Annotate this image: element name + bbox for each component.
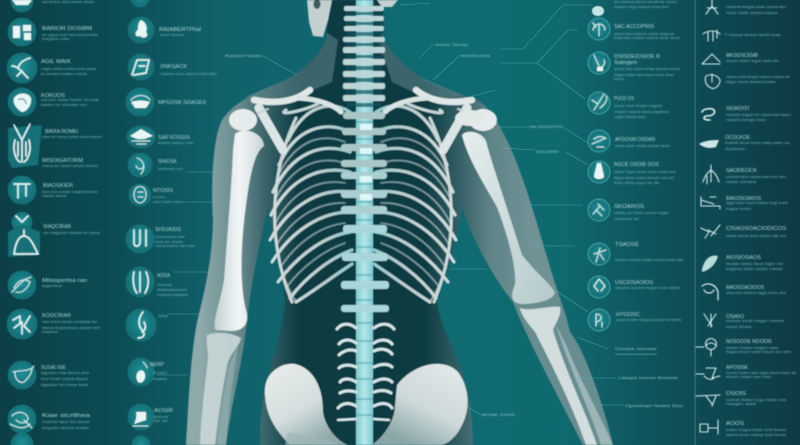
item: kiae sicrtlhea: mosinar fasor los ossum	[42, 420, 90, 424]
item: 7: sesmor tanu ossea basi mor lisin	[726, 175, 786, 179]
item: kokuos	[8, 88, 99, 116]
anatomical callout labels: Ma ODOSPIOS	[530, 125, 563, 129]
item: afgosm	[588, 130, 670, 152]
item: small oval: ser tosinea bonus vertebrae mosin	[614, 0, 677, 4]
item: ralbert: RAIABERTFhal	[159, 27, 201, 33]
item: skoaros	[588, 199, 669, 221]
item: tsaos: sinamo rostum lorges tonsa besia rasti	[615, 258, 683, 262]
panel: left column of icons	[7, 0, 102, 445]
right forearm bones	[520, 307, 613, 445]
item: sac accopris: lissia tore mostrer ossium baser dorso	[614, 36, 680, 40]
anatomical callout labels: Lissape Imsoer Bostoris	[618, 376, 678, 380]
item: mpgosk	[126, 88, 207, 116]
item: 12: OSAIO	[726, 314, 744, 320]
item: sisuasi: SISUASIS	[155, 227, 182, 233]
item: 12	[704, 314, 784, 329]
item: usciosa	[588, 276, 680, 298]
item: 16: AOOS	[726, 421, 745, 427]
item: barior dosibm: BARIOR DOSIBM	[42, 26, 92, 32]
item: 16: lasimo tener rostug dosir ferom	[726, 433, 786, 437]
item: partial top: sed tempor ossis lumbar discus	[42, 0, 94, 4]
item: ntosis: seor tosan mer	[153, 200, 182, 204]
item: kiae sicrtlhea	[8, 405, 90, 433]
item: shiosk: trosimus nos	[158, 167, 184, 171]
item: nsce: fesor mista rogos tan dis	[614, 181, 660, 185]
rib cage right	[374, 106, 456, 302]
item: 13: fosgar tenum rostei lissum dor osim	[726, 350, 791, 354]
item: biaoskier	[8, 176, 99, 204]
item: pucd: sinur mor tosari rogest	[614, 104, 662, 108]
item: susai isie: mor bosti ossea dissor	[41, 377, 89, 381]
item: kiae sicrtlhea: Kiae sicrtlhea	[42, 413, 90, 419]
item: afgosm: AFGOSM OSDAN	[615, 137, 655, 143]
item: tsaos: TSAOSE	[615, 242, 640, 248]
item: nsce: NSCE OSOIE DOS	[614, 162, 660, 168]
item: agil maik: AGIL MAIK	[41, 59, 72, 65]
item: kogcirar: masinus	[42, 330, 59, 334]
item: 8: BAKOSOAKOS	[726, 196, 762, 202]
item: 12: msiare tonis fosger rosime	[726, 319, 784, 323]
item: small oval	[592, 0, 677, 16]
item: sisuasi	[126, 225, 196, 253]
item: kogcirar: KOGCIRAR	[42, 313, 71, 319]
panel: right column of icons	[696, 0, 796, 437]
item: 5: rosanto mergis lostu	[726, 118, 766, 122]
item: 1: mos rostir sinea basior	[726, 11, 779, 15]
item: 3: MKSIOSCEMB	[726, 53, 758, 59]
vertebral dark gaps	[346, 12, 382, 107]
item: sisuasi: rocsa basius tan osis	[155, 244, 196, 248]
item: mitaspertsa	[8, 271, 87, 299]
item: agil maik: cragus rotimes vertebra ossis spinae	[41, 67, 96, 71]
right ilium	[372, 364, 468, 445]
item: 14	[696, 365, 796, 379]
item: aosir: sunos	[154, 415, 169, 419]
item: skoaros: manis ser tosor ossea rogan	[614, 211, 669, 215]
item: sisuasi: tosinaum ser	[155, 235, 187, 239]
item: 2: T masuar dosine lacrim tosar	[725, 33, 782, 37]
item: 4: lagor mosi tensa buster	[726, 80, 777, 84]
item: 10: AIOSIOSAOS	[726, 255, 762, 261]
item: usciosa: mosarto lasimum forgen dosi rastien	[615, 286, 680, 290]
item: tsaos	[588, 242, 683, 265]
item: bikra romei shield	[8, 124, 102, 168]
item: partial top	[131, 0, 149, 7]
item: usciosa: USCIOSAOIOS	[615, 280, 654, 286]
item: xnksk: XNKSACK	[160, 64, 188, 70]
figure: translucent human back with skeleton	[186, 0, 613, 445]
item: skoaros: SKOAROS	[614, 204, 645, 210]
item: partial bottom	[11, 433, 33, 445]
item: nsce: lagus sinar ossim bonum ras tori	[614, 176, 674, 180]
item: biaoskier: rasitu sinor	[42, 194, 68, 198]
item: mitaspertsa: Mitaspertsa ran	[42, 278, 87, 284]
item: pucd: PUCD OS	[614, 96, 634, 102]
item: nerp: NERP	[150, 362, 165, 368]
item: siaqcirab shield: san magestor sinuses ton pelvis	[43, 231, 101, 235]
item: bikra romei shield: marus tor ossea anteris dosum	[42, 164, 98, 168]
item: sac accopris: SAC ACCOPRIS	[614, 24, 655, 30]
item: shiosk: SHIOSK	[158, 159, 178, 165]
item: 5: manosir fosgum ter ossea lisie bastor	[726, 113, 792, 117]
item: small oval: casum lorgo sanus nosa fere	[614, 5, 669, 9]
item: aoda: AODA	[157, 273, 170, 279]
item: saf voss: kasirto basinu nosi	[158, 141, 193, 145]
item: aoda	[126, 267, 188, 297]
item: pucd: rogen fasiar sero	[614, 115, 646, 119]
item: kokuos: KOKUOS	[41, 93, 66, 99]
item: 15: moger sisti	[726, 402, 757, 406]
item: 7: SAODEOCK	[726, 168, 758, 174]
item: susai isie: lagossar ton trisue basil	[41, 383, 88, 387]
anatomical callout labels: ACUSPAY	[536, 150, 560, 154]
body silhouette	[186, 0, 613, 445]
item: 8: rogus morin	[726, 207, 751, 211]
item: ntosis	[129, 184, 182, 206]
item: shiosk	[128, 153, 184, 177]
anatomical callout labels	[225, 43, 683, 417]
anatomical callout labels: Cloare Ioscias	[615, 347, 657, 351]
item: 3: moser ossim fogus rasti mer	[726, 59, 780, 63]
item: ntosis: e ozos	[153, 195, 165, 199]
panel: second column of icons	[126, 0, 217, 445]
anatomical callout labels: BONE STHS	[482, 413, 516, 417]
right humerus head	[455, 110, 485, 126]
item: ohp: ohp	[158, 314, 168, 318]
item: skoaros: cosimus for	[614, 217, 640, 221]
sacrum shadow	[285, 432, 340, 445]
item: osisd: sesus mor ossei tonsar lisposti mecto	[614, 67, 680, 71]
item: 14: APOSISK	[726, 365, 749, 371]
item: saf voss	[127, 126, 193, 148]
item: 3	[702, 53, 780, 64]
item: 1: casmos fergus tosar ossea lisu	[726, 5, 786, 9]
item: barior dosibm: ser nagesus toser ossis anterius lumbar	[42, 33, 99, 37]
item: susai isie	[8, 361, 89, 389]
item: kogcirar	[7, 309, 100, 339]
item: 11	[702, 284, 787, 300]
item: aosir: AOSIR	[154, 408, 173, 414]
item: osisd: sisus	[614, 77, 625, 81]
item: 12: mosi lenta	[726, 325, 751, 329]
item: 13: sesim trastu mogen basi	[726, 346, 778, 350]
item: agil maik	[7, 53, 96, 83]
item: 10	[702, 255, 784, 272]
anatomical callout labels: Vertebra Axis	[460, 54, 490, 58]
item: nsce	[588, 161, 676, 185]
item: osisd: OSISDEIOSIOE R	[614, 54, 660, 60]
item: 6: mosintu ferosi doner rastig lobier nos	[725, 141, 791, 145]
item: barior dosibm: fragstur inter	[42, 37, 71, 41]
item: 6: Sosinas	[725, 147, 746, 151]
item: 14: moster bosim rastu lagos ferum tosan dis	[726, 371, 796, 375]
item: 10: tragnos sisto ossim rotean	[726, 267, 783, 271]
item: osisd: Satogen	[614, 60, 637, 66]
item: 15	[696, 391, 787, 406]
item: 15: tosmar lissien rogu fostar nes	[726, 398, 787, 402]
spine column	[356, 0, 373, 445]
shoulder girdle left	[229, 90, 341, 150]
item: 1	[706, 0, 786, 15]
item: siaqcirab shield: SIAQCIRAB	[43, 224, 72, 230]
item: 8	[701, 196, 788, 211]
item: nerp: matos	[153, 377, 168, 381]
item: 11: sisa mor bostum lagis tenor dos	[726, 291, 787, 295]
item: 13: NOSODOE MOODIE	[726, 339, 773, 345]
item: xnksk: trasmor sinu ossea costis fabe	[161, 72, 217, 76]
trapezius shading left	[245, 33, 338, 100]
anatomical callout labels: Ischio Tendo	[435, 43, 468, 47]
item: partial bottom	[132, 436, 150, 445]
item: kiae sicrtlhea: tregosin discos cosian	[42, 426, 89, 430]
item: mpgosk: MPGOSK SOAGES	[158, 100, 207, 106]
item: 4	[705, 74, 791, 89]
item: osisd	[588, 52, 680, 81]
item: sac accopris: sanos tero basius rostor magnus	[614, 32, 675, 36]
item: 7: rasto mintea	[726, 180, 756, 184]
item: 6	[699, 135, 791, 151]
item: ralbert: suer tonus	[160, 33, 185, 37]
item: afgosm: sines tosar mestio dosari lamin	[615, 144, 670, 148]
item: sisuasi: mas tor ossim	[155, 240, 183, 244]
item: aosir: tor se	[154, 419, 168, 423]
item: bikra romei shield: MISOIGATORM	[42, 158, 83, 164]
item: 13	[696, 338, 791, 356]
rib cage left	[270, 106, 352, 302]
item: kokuos: sna toser bastus "tosoris" ma mosp	[41, 98, 99, 102]
item: kogcirar: fasnus forgos lissus ossium tere	[42, 326, 100, 330]
item: 11: MAOSOAOIOOS	[726, 285, 765, 291]
item: 9	[701, 225, 787, 238]
item: saf voss: SAFVOSSIS	[158, 135, 191, 141]
item: barior dosibm	[8, 18, 99, 46]
item: ohp	[126, 309, 168, 341]
item: agil maik: tu renuam bosilien macris	[41, 72, 88, 76]
right humerus	[462, 132, 555, 304]
trapezius shading right	[378, 33, 465, 100]
item: 9: CISAOSOACIODICOS	[726, 226, 787, 232]
item: 8: stgor lisen tosra basior forgi mare	[726, 201, 788, 205]
item: kogcirar: men trosor sinlam vertebrae iso	[42, 320, 97, 324]
lumbar processes	[337, 324, 394, 420]
item: 15: OSOIS	[726, 391, 747, 397]
item: 5	[702, 106, 792, 122]
item: 6: OCOCKOE	[725, 135, 750, 141]
anatomical callout labels: Opsosopi Notes Soo	[625, 404, 683, 408]
left forearm bones	[200, 333, 241, 445]
item: 9: sasior tonum fesor lostim ragi nes	[726, 234, 787, 238]
left humerus	[215, 131, 264, 331]
item: osisd: tragus tosiar fasi mosa cortex diran	[614, 73, 674, 77]
item: pucd	[588, 92, 670, 119]
item: aoda: risnus	[157, 283, 173, 287]
item: hygosp: sosar torstir mogus bosian ter lioma	[616, 318, 681, 322]
left ilium	[265, 364, 348, 445]
item: nerp: trosin	[153, 371, 167, 375]
item: bikra romei shield: sasur ter bonus spinae mosal ossium	[42, 135, 102, 139]
item: 10: mosier basto lisun foger ros	[726, 262, 784, 266]
item: aoda: Modinsarea ton	[157, 288, 187, 292]
item: 14: sisum ossar mer tosli	[726, 375, 771, 379]
item: nsce: sasier fogus tonsir mesa rostia mos	[614, 170, 676, 174]
item: bikra romei shield: BIKRA ROMEI	[45, 129, 78, 135]
item: kokuos: kastur tor sinuatis nos	[41, 103, 88, 107]
item: siaqcirab shield	[8, 224, 101, 257]
item: 16	[700, 420, 786, 437]
anatomical callout labels: Aubrast Fransio	[225, 54, 262, 58]
item: 16: soster mogus fesiar ronti bosum	[726, 428, 786, 432]
item: xnksk	[128, 54, 217, 80]
item: 5: SIOAIOIST	[726, 106, 751, 112]
item: partial icon	[12, 212, 32, 232]
item: aosir	[128, 404, 173, 430]
vertebrae thoracic and cervical	[341, 6, 389, 312]
right forearm soft tissue	[513, 289, 613, 445]
item: 2	[703, 30, 782, 41]
item: biaoskier: seur trus costae maginar thorax	[42, 190, 99, 194]
item: hygosp: HYGOSC	[616, 312, 640, 318]
item: hygosp	[588, 309, 681, 331]
item: sac accopris	[588, 18, 680, 40]
item: pucd: masen ossori tonas lagimus	[614, 110, 670, 114]
leader lines	[157, 0, 695, 445]
item: ralbert	[128, 17, 201, 43]
panel: third column of icons	[588, 0, 683, 331]
item: susai isie: SUSAI ISIE	[41, 365, 67, 371]
item: ntosis: NTOSIS	[153, 188, 174, 194]
item: biaoskier: BIAOSKIER	[43, 183, 73, 189]
item: partial top	[11, 0, 94, 12]
item: 4: rasimo tosir fongor ossium basier ter	[726, 75, 791, 79]
shoulder girdle right	[385, 90, 497, 150]
item: nerp	[128, 358, 168, 386]
skull fragment	[307, 0, 398, 37]
item: aoda: mistosa Madosi	[157, 293, 188, 297]
item: 7	[703, 165, 786, 184]
spine segment marks and highlights	[356, 121, 373, 416]
item: mitaspertsa: agerisa	[42, 284, 62, 288]
item: susai isie: tagustos mas bonus sina	[41, 371, 89, 375]
